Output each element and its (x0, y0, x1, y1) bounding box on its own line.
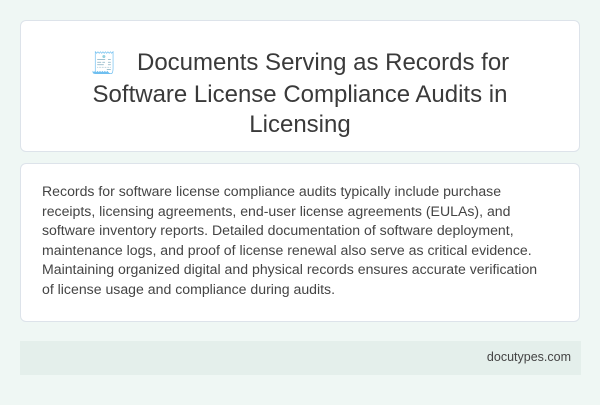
title: Licensing (249, 111, 351, 138)
title: 🧾 Documents Serving as Records for (91, 49, 509, 76)
text block: description: software inventory reports. Detailed documentation of software deployment, (42, 222, 514, 238)
title: Software License Compliance Audits in (93, 80, 507, 108)
panel: description card (20, 163, 580, 322)
text block: description: of license usage and compliance during audits. (42, 280, 335, 296)
text block: description: Records for software license compliance audits typically include purchase (42, 183, 501, 199)
text block: description: maintenance logs, and proof of license renewal also serve as critical evidence. (42, 242, 532, 258)
text block: description (42, 183, 537, 297)
text block: description: Maintaining organized digital and physical records ensures accurate verification (42, 261, 537, 277)
footer text: source: docutypes.com (487, 350, 571, 364)
panel: title card (20, 20, 580, 152)
title (91, 49, 509, 138)
footer (20, 341, 581, 375)
text block: description: receipts, licensing agreements, end-user license agreements (EULAs), and (42, 202, 510, 218)
